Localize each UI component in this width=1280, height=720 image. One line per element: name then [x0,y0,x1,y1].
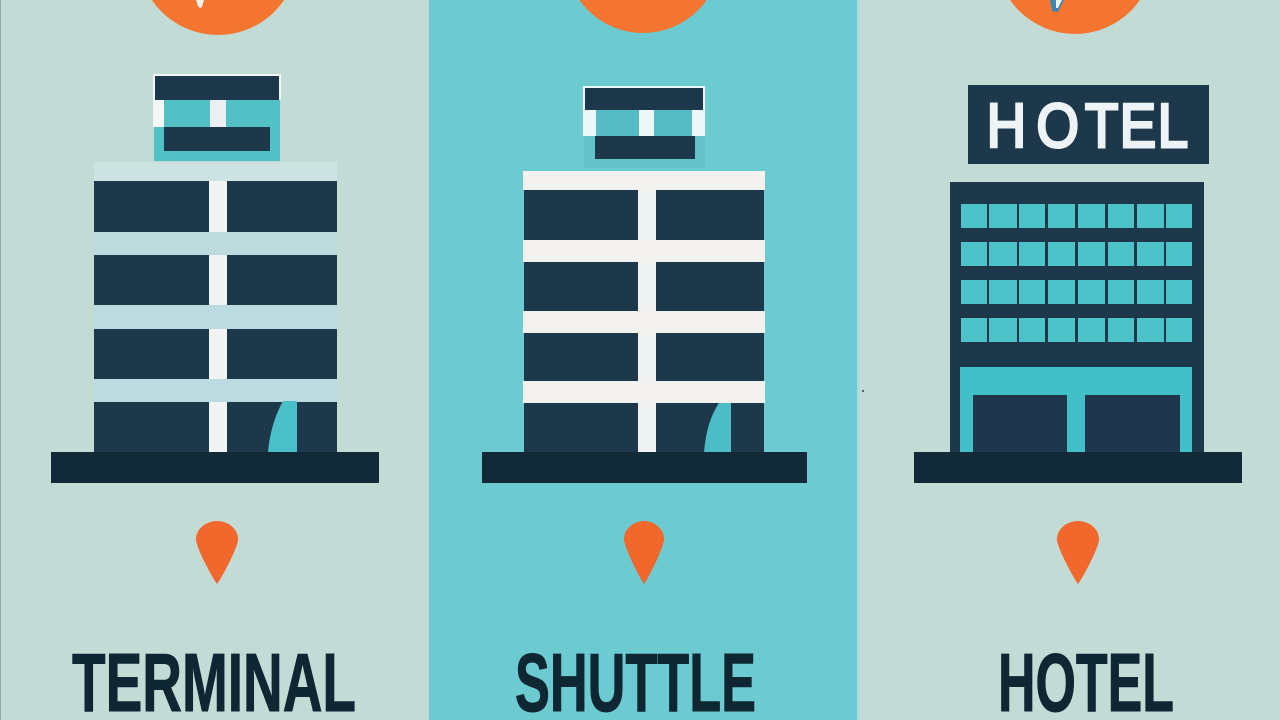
icon: location pin hotel [1057,521,1099,584]
icon: location pin shuttle [624,521,664,584]
shuttle building [482,86,807,483]
panel: terminal [0,0,430,720]
icon: orange circle shuttle [565,0,721,33]
panel: hotel [859,0,1280,720]
icon: orange circle terminal [138,0,298,35]
hotel building [914,182,1242,483]
terminal building [51,74,379,483]
window grid [961,204,1192,342]
icon: orange circle hotel [996,0,1154,34]
panel: shuttle [429,0,859,720]
hotel sign: HOTEL [987,92,1188,161]
icon: location pin terminal [196,521,238,584]
